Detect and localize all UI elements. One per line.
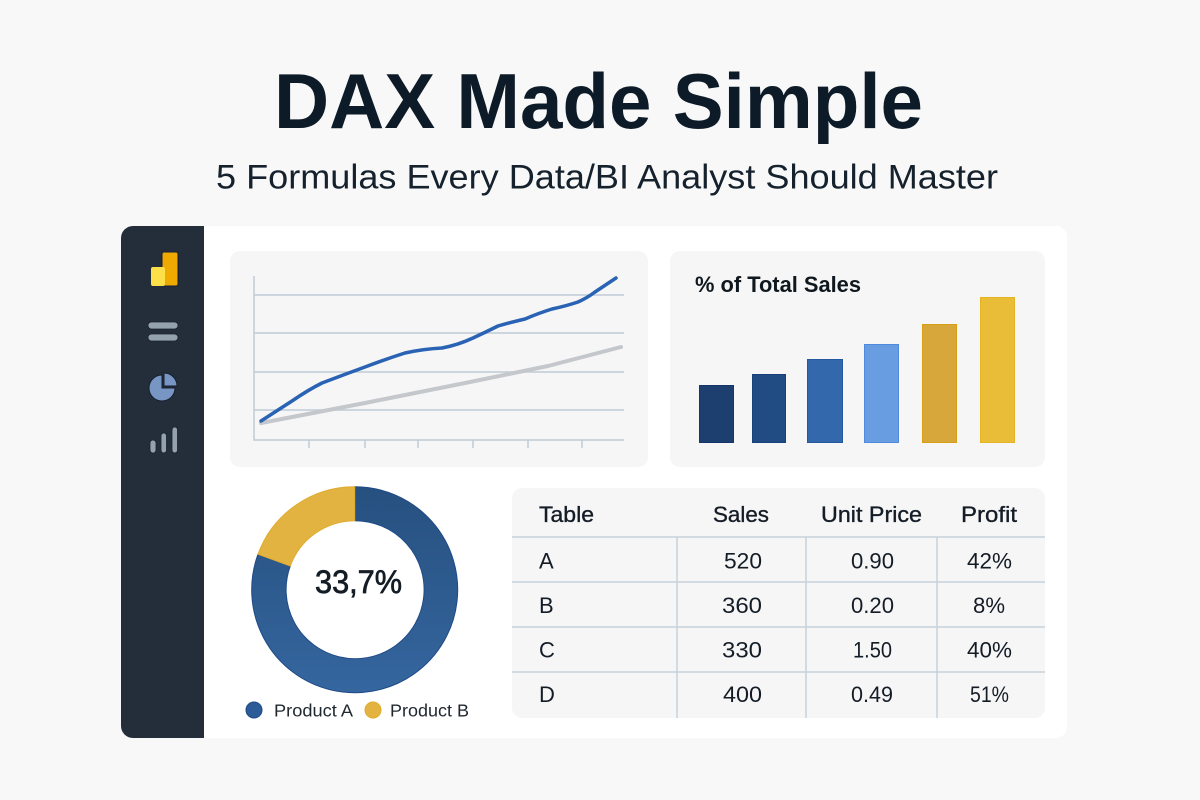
- table rows: 51%: [970, 682, 1009, 707]
- legend: Product A: [274, 700, 353, 720]
- table header: [539, 502, 1017, 527]
- table rows: 42%: [967, 548, 1012, 574]
- bars: [700, 298, 1014, 442]
- icon: power bi logo: [151, 252, 178, 286]
- panel: sidebar: [121, 226, 204, 738]
- table rows: 330: [722, 638, 762, 662]
- donut chart: [252, 487, 458, 693]
- chart title: % of Total Sales: [695, 272, 861, 297]
- panel: line chart: [230, 251, 648, 467]
- table rows: 0.20: [851, 593, 894, 618]
- panel: table: [512, 488, 1045, 718]
- table rows: 40%: [967, 638, 1012, 662]
- table rows: B: [539, 593, 554, 618]
- table rows: 8%: [973, 593, 1005, 618]
- table rows: [539, 548, 1012, 707]
- series: gray line: [261, 347, 621, 423]
- table rows: D: [539, 682, 555, 707]
- icon: menu: [148, 322, 178, 341]
- table rows: 1.50: [853, 638, 892, 662]
- legend: [246, 700, 469, 720]
- table header: Unit Price: [821, 502, 922, 527]
- legend: Product B: [390, 700, 469, 720]
- panel: dashboard: [121, 226, 1067, 738]
- table rows: 0.49: [851, 682, 893, 707]
- table header: Sales: [713, 502, 769, 527]
- table rows: 360: [722, 593, 762, 618]
- table rows: C: [539, 638, 555, 662]
- table header: Profit: [961, 502, 1017, 527]
- subtitle: 5 Formulas Every Data/BI Analyst Should Master: [216, 158, 998, 196]
- title: DAX Made Simple: [274, 57, 923, 145]
- panel: bar chart: [670, 251, 1045, 467]
- icon: bar chart: [150, 427, 178, 453]
- series: blue line: [261, 278, 616, 421]
- donut value: 33,7%: [315, 564, 402, 600]
- table rows: 400: [723, 682, 762, 707]
- table rows: 0.90: [851, 548, 894, 574]
- table header: Table: [539, 502, 594, 527]
- icon: pie chart: [149, 373, 177, 401]
- table rows: A: [539, 548, 554, 574]
- table rows: 520: [724, 548, 762, 574]
